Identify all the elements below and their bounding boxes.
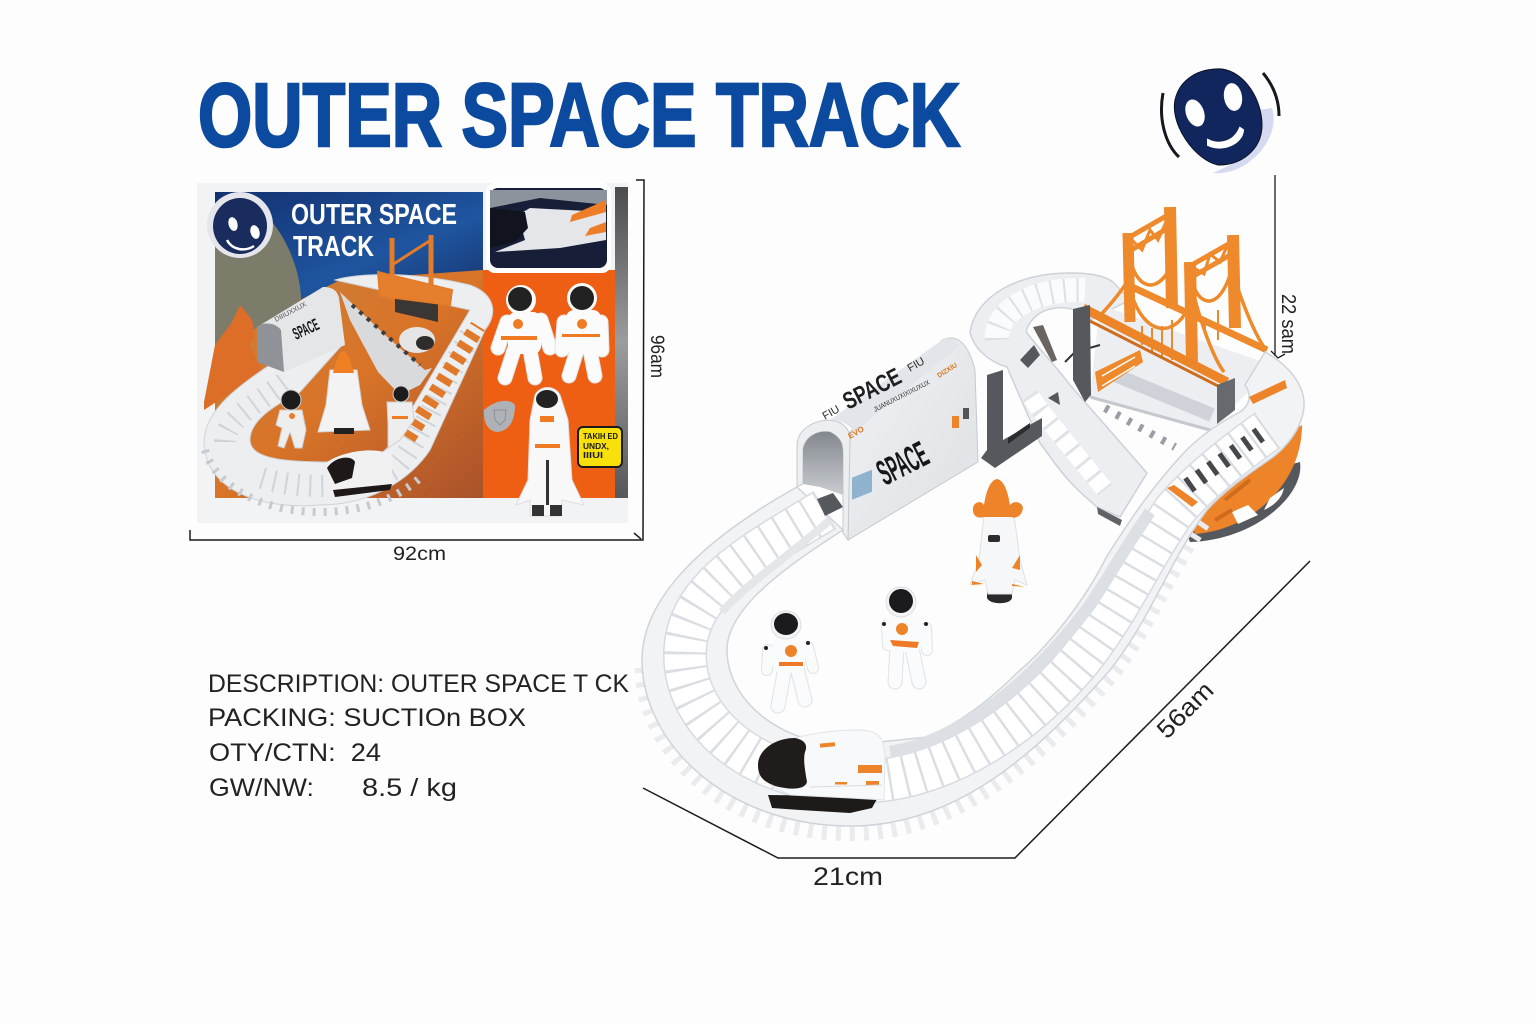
grey bridge pillars <box>1073 305 1235 424</box>
bridge front towers, cables and beam <box>1083 233 1266 388</box>
label: track width: 21cm <box>813 863 883 891</box>
label: track height: 22 sam <box>1277 294 1299 354</box>
box yellow badge: TAKIH ED <box>583 432 618 441</box>
space tunnel: FIU <box>906 355 927 375</box>
box blue sky <box>215 192 483 302</box>
space tunnel: EVO <box>846 424 866 441</box>
text block: specifications: DESCRIPTION: OUTER SPACE T CK <box>208 670 629 698</box>
label: track depth: 56am <box>1151 676 1219 744</box>
long lower track <box>642 352 1304 834</box>
box logo <box>207 192 273 258</box>
box rocket astronaut <box>516 388 584 516</box>
box astronaut right <box>562 283 602 376</box>
text block: specifications: 8.5 / kg <box>362 774 457 802</box>
box window with train <box>486 183 611 273</box>
icon: smiley logo <box>1161 69 1279 173</box>
train <box>758 730 885 813</box>
tunnel upper SPACE lettering: SPACE <box>838 363 906 415</box>
box tunnel <box>257 287 345 372</box>
box orange mountain <box>204 305 262 410</box>
box track <box>204 275 493 512</box>
space tunnel: DIZXIU <box>936 362 959 380</box>
box heading: TRACK <box>293 231 374 263</box>
space tunnel <box>797 338 978 540</box>
rocket figure <box>970 479 1027 603</box>
box grey planet <box>215 222 301 360</box>
dimension lines: track footprint <box>643 561 1310 858</box>
orange round base <box>1185 425 1302 542</box>
text block: specifications <box>208 670 629 802</box>
box astronaut left <box>498 285 550 378</box>
box tunnel: SPACE <box>290 315 322 344</box>
space tunnel: JUANUXUXIXIXUXUX <box>873 379 931 414</box>
box mars ground <box>215 270 483 498</box>
title: OUTER SPACE TRACK <box>198 66 960 166</box>
panel: product box illustration <box>197 183 628 523</box>
box heading: OUTER SPACE <box>291 199 457 231</box>
label: box height: 96am <box>646 335 667 378</box>
astronaut figure left <box>764 611 813 706</box>
panel: track set <box>642 207 1304 834</box>
tunnel large SPACE lettering: SPACE <box>870 433 935 493</box>
dimension line: track height <box>1271 175 1285 358</box>
box rocket <box>318 351 370 434</box>
box yellow badge <box>578 427 622 467</box>
label: box width: 92cm <box>393 544 446 565</box>
text block: specifications: PACKING: SUCTIOn BOX <box>208 704 526 732</box>
bridge back beam and towers <box>1128 207 1267 350</box>
box train <box>327 450 392 497</box>
box yellow badge: UNDX, <box>583 442 609 451</box>
space tunnel: FIU <box>820 403 842 423</box>
box small astronauts <box>276 386 414 448</box>
box bridge <box>378 235 452 322</box>
box dark side strip <box>615 187 628 498</box>
upper loop and ramp <box>970 273 1147 526</box>
box tunnel: DIIIUXXUX <box>274 301 308 324</box>
grey tunnel support <box>981 370 1042 468</box>
box grey coin <box>484 401 515 432</box>
text block: specifications: GW/NW: <box>209 774 314 802</box>
text block: specifications: OTY/CTN: 24 <box>209 739 381 767</box>
box orange panel <box>483 270 615 498</box>
box yellow badge: IIIUI <box>583 451 603 460</box>
box heading <box>291 199 457 263</box>
bridge deck <box>1065 305 1280 447</box>
astronaut figure right <box>882 587 928 682</box>
box dimension lines <box>190 180 644 540</box>
